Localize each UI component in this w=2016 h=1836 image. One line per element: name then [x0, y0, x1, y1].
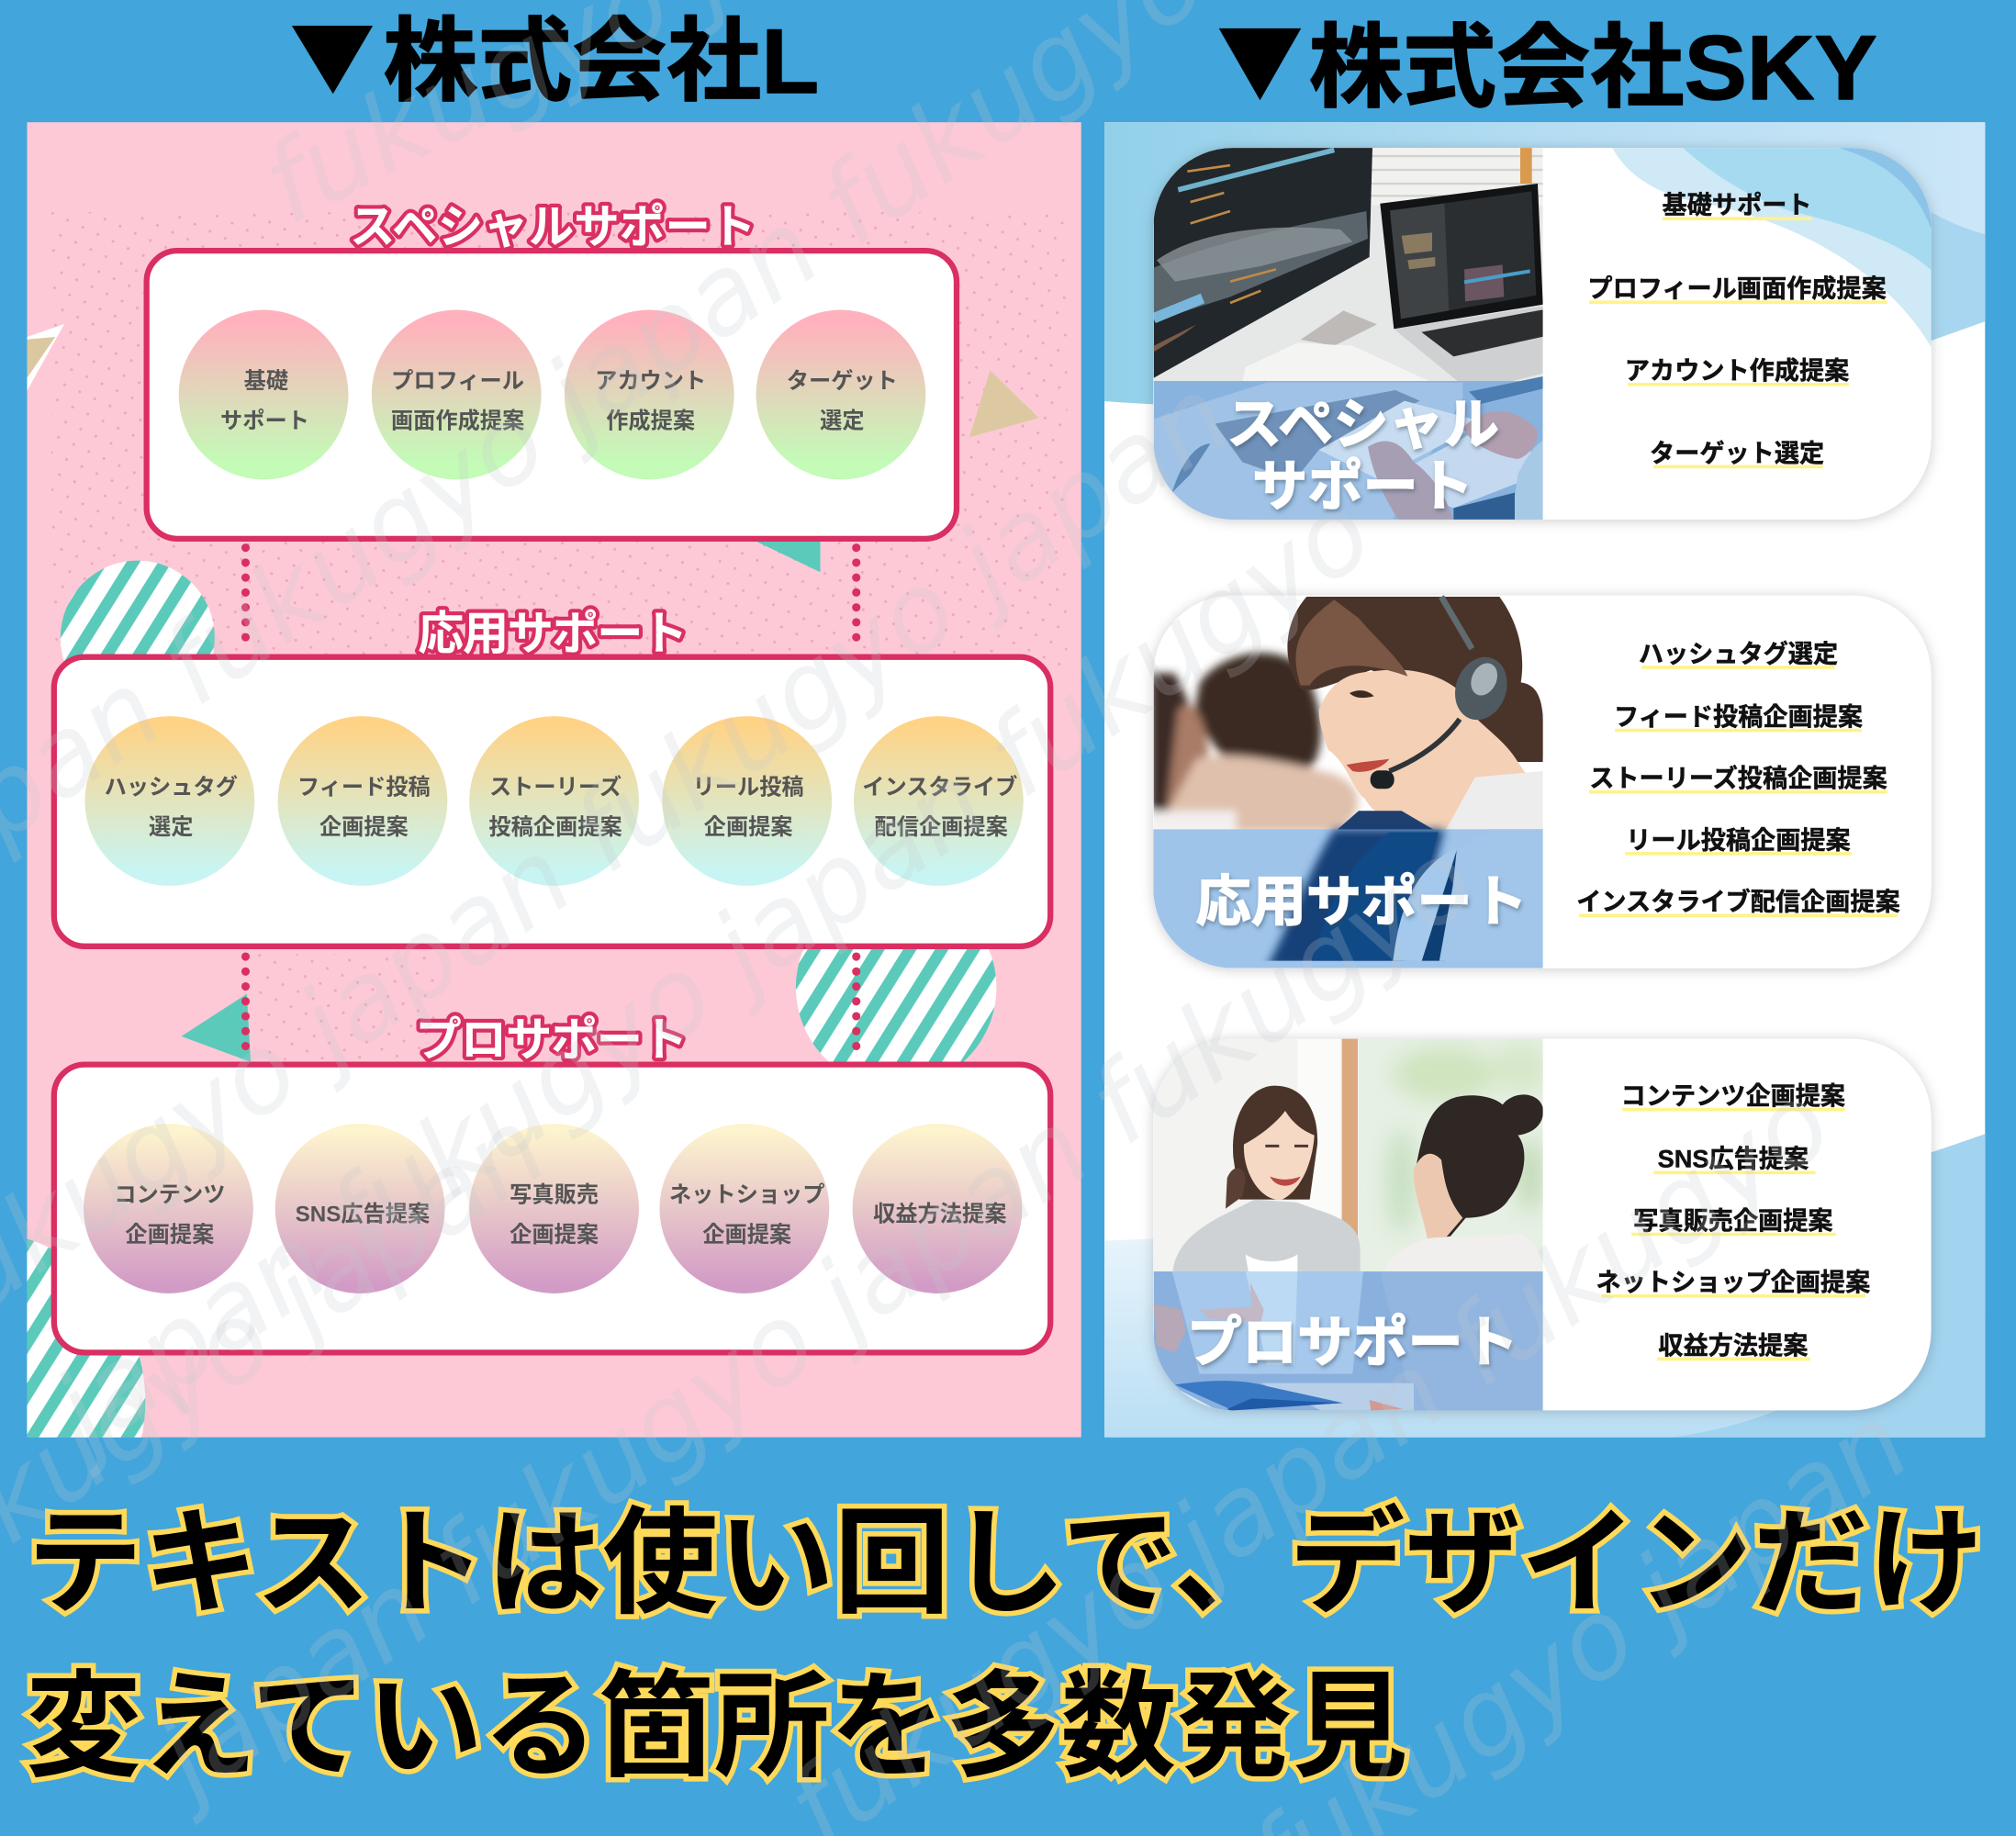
circle: instalive	[854, 716, 1024, 886]
circle: revenue	[853, 1124, 1022, 1293]
circle: net shop: ネットショップ	[669, 1183, 824, 1208]
circle: feed: 企画提案	[319, 815, 409, 840]
circle: basics	[179, 310, 349, 479]
monitor	[1154, 147, 1372, 378]
decoration: striped circle bottom left	[27, 1239, 145, 1438]
list: pro support items: 収益方法提案	[1658, 1331, 1808, 1360]
connector dots lower	[245, 957, 857, 1059]
section heading: pro support: プロサポート	[415, 1013, 688, 1066]
circle: reels: 企画提案	[704, 815, 793, 840]
list: pro support items: 写真販売企画提案	[1633, 1206, 1833, 1235]
list: pro support items: SNS広告提案	[1658, 1145, 1809, 1173]
list: special support items: ターゲット選定	[1650, 439, 1824, 467]
decoration: teal triangle top	[756, 542, 821, 572]
connector dots upper	[245, 548, 857, 651]
decoration: striped circle top left	[61, 560, 215, 661]
heading: company L: 株式会社L	[383, 11, 819, 113]
circle: contents: コンテンツ	[114, 1183, 225, 1208]
list: pro support items: コンテンツ企画提案	[1621, 1081, 1845, 1110]
circle: feed	[278, 716, 447, 886]
circle: net shop: 企画提案	[702, 1223, 791, 1248]
list: special support items	[1587, 191, 1887, 467]
blue overlay	[1154, 381, 1543, 521]
heading: company SKY: 株式会社SKY	[1309, 17, 1877, 119]
circle: instalive: 配信企画提案	[875, 815, 1008, 840]
circle: profile	[372, 310, 542, 479]
circle: account: アカウント	[595, 369, 706, 394]
watermark: fukugyo japan: japan fukugyo japan fukugyo	[22, 468, 1394, 1482]
group: pro support box	[54, 1065, 1050, 1352]
decoration: striped circle right	[795, 949, 997, 1061]
panel: company SKY background	[1104, 122, 1985, 1438]
circle: reels	[662, 716, 832, 886]
list: special support items: プロフィール画面作成提案	[1587, 274, 1887, 303]
watermark: fukugyo japan: japan fukugyo japan fukugyo	[125, 815, 1496, 1829]
section heading: applied support: 応用サポート	[418, 607, 688, 659]
list: applied support items: インスタライブ配信企画提案	[1576, 888, 1900, 916]
group: special support box	[147, 251, 957, 539]
circle: feed: フィード投稿	[297, 776, 431, 800]
circle: hashtag: 選定	[149, 815, 193, 840]
circle: sns ads	[275, 1124, 445, 1293]
laptop	[1380, 184, 1543, 329]
decoration: tan triangle left	[27, 324, 64, 391]
circle: photo sales: 写真販売	[510, 1183, 599, 1208]
panel: company L support chart	[27, 122, 1081, 1438]
photo title: 応用サポート	[1195, 870, 1528, 933]
circle: basics: サポート	[220, 409, 309, 433]
circle: sns ads: SNS広告提案	[296, 1203, 430, 1227]
circle: hashtag	[84, 716, 254, 886]
circle: target: ターゲット	[787, 369, 898, 394]
photo title: スペシャル	[1226, 393, 1499, 455]
list: special support items: 基礎サポート	[1663, 191, 1812, 219]
circle: target	[756, 310, 925, 479]
circle: account	[565, 310, 734, 479]
list: applied support items: ストーリーズ投稿企画提案	[1589, 764, 1887, 792]
circle: photo sales	[469, 1124, 639, 1293]
card: applied support	[1150, 595, 1932, 968]
card: pro support	[1153, 1037, 1932, 1416]
conclusion text line 1: テキストは使い回しで、デザインだけ	[27, 1498, 1984, 1628]
photo title: プロサポート	[1187, 1311, 1518, 1373]
section heading: special support: スペシャルサポート	[350, 201, 756, 253]
list: applied support items: ハッシュタグ選定	[1639, 639, 1838, 667]
card: special support	[1153, 147, 1932, 521]
list: pro support items: ネットショップ企画提案	[1596, 1268, 1870, 1296]
photo: call centre operator	[1150, 595, 1543, 968]
circle: basics: 基礎	[244, 369, 288, 394]
list: applied support items: リール投稿企画提案	[1626, 825, 1851, 854]
circle: stories	[469, 716, 639, 886]
circle: revenue: 収益方法提案	[873, 1203, 1006, 1227]
circle: net shop	[659, 1124, 829, 1293]
group: applied support box	[54, 657, 1050, 946]
circle: stories: ストーリーズ	[489, 775, 622, 800]
list: special support items: アカウント作成提案	[1625, 356, 1849, 385]
photo title: サポート	[1252, 454, 1473, 517]
photo: two women talking	[1153, 1037, 1549, 1416]
circle: stories: 投稿企画提案	[488, 815, 622, 840]
circle: hashtag: ハッシュタグ	[105, 775, 238, 800]
circle: instalive: インスタライブ	[862, 775, 1017, 800]
circle: photo sales: 企画提案	[510, 1223, 599, 1248]
list: pro support items	[1596, 1081, 1870, 1360]
circle: profile: 画面作成提案	[391, 409, 524, 433]
photo title	[1226, 393, 1499, 517]
decoration: tan triangle right	[969, 370, 1039, 437]
documents on desk	[1301, 310, 1377, 346]
circle: account: 作成提案	[606, 409, 695, 433]
circle: contents: 企画提案	[125, 1223, 214, 1248]
photo: computer monitor and laptop	[1154, 147, 1543, 521]
list: applied support items: フィード投稿企画提案	[1614, 702, 1863, 731]
decoration: teal triangle lower	[181, 994, 251, 1062]
circle: reels: リール投稿	[693, 776, 804, 800]
circle: contents	[84, 1124, 253, 1293]
circle: target: 選定	[820, 409, 865, 433]
conclusion text line 2: 変えている箇所を多数発見	[26, 1662, 1408, 1791]
list: applied support items	[1576, 639, 1900, 916]
circle: profile: プロフィール	[391, 369, 524, 394]
